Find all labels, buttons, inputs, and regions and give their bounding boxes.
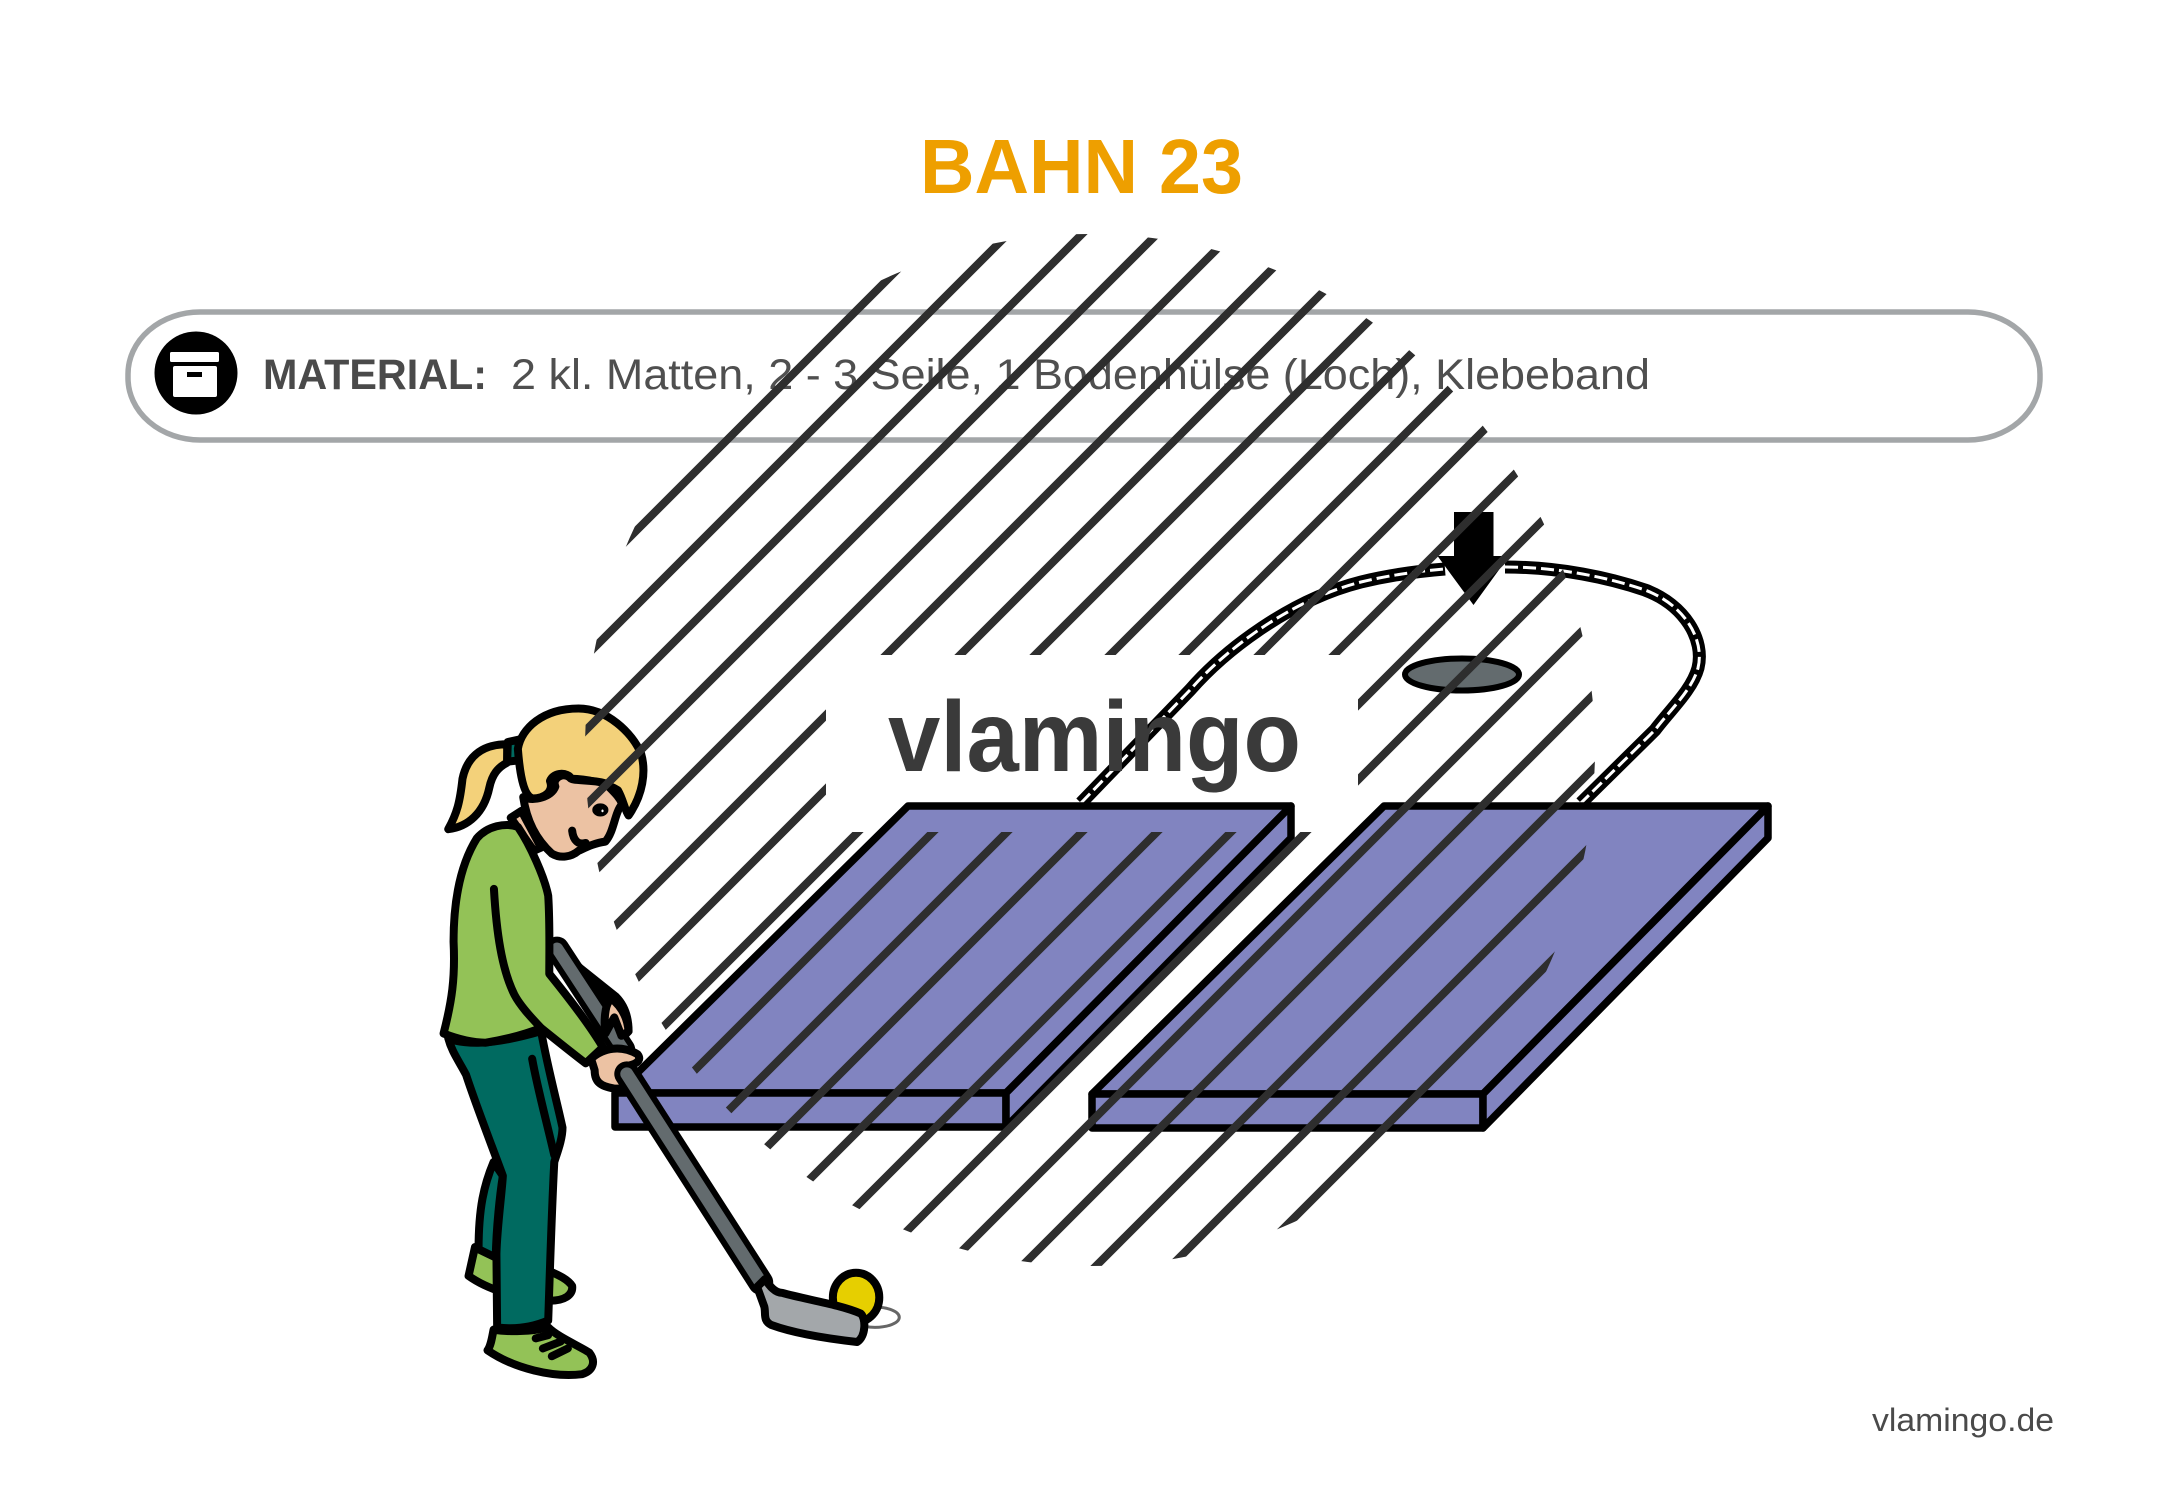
near hand bbox=[591, 1049, 639, 1089]
hair tie bbox=[507, 740, 519, 762]
panel: material bar bbox=[128, 312, 2040, 440]
material label: MATERIAL: bbox=[263, 351, 487, 399]
club head bbox=[757, 1279, 864, 1342]
hole bbox=[1405, 658, 1519, 690]
hair bbox=[518, 708, 643, 815]
girl with golf club bbox=[444, 708, 899, 1375]
torso and arm bbox=[444, 825, 603, 1063]
mat right bbox=[1092, 806, 1768, 1128]
material list: 2 kl. Matten, 2 - 3 Seile, 1 Bodenhülse (Loch), Klebeband bbox=[511, 351, 1650, 399]
icon: archive box bbox=[154, 332, 238, 414]
ball bbox=[833, 1273, 879, 1322]
front leg bbox=[448, 1031, 562, 1328]
mat left bbox=[615, 806, 1291, 1127]
icon: arrow to hole bbox=[1438, 512, 1509, 605]
front shoe bbox=[487, 1327, 593, 1375]
eye bbox=[594, 805, 606, 815]
rope course bbox=[1081, 567, 1699, 803]
face bbox=[523, 775, 622, 857]
ponytail bbox=[448, 744, 507, 829]
back leg bbox=[479, 1162, 503, 1258]
back shoe bbox=[469, 1247, 572, 1301]
club grip bbox=[557, 949, 623, 1050]
far hand bbox=[598, 992, 629, 1036]
watermark hatching bbox=[585, 234, 1595, 1266]
club shaft bbox=[627, 1074, 761, 1282]
title: BAHN 23 bbox=[920, 124, 1243, 210]
footer source: vlamingo.de bbox=[1872, 1402, 2054, 1438]
tee ring bbox=[851, 1307, 899, 1327]
mouth bbox=[572, 831, 586, 844]
far arm bbox=[557, 942, 629, 1043]
logo wordmark: vlamingo bbox=[888, 681, 1301, 793]
neck bbox=[511, 811, 541, 851]
